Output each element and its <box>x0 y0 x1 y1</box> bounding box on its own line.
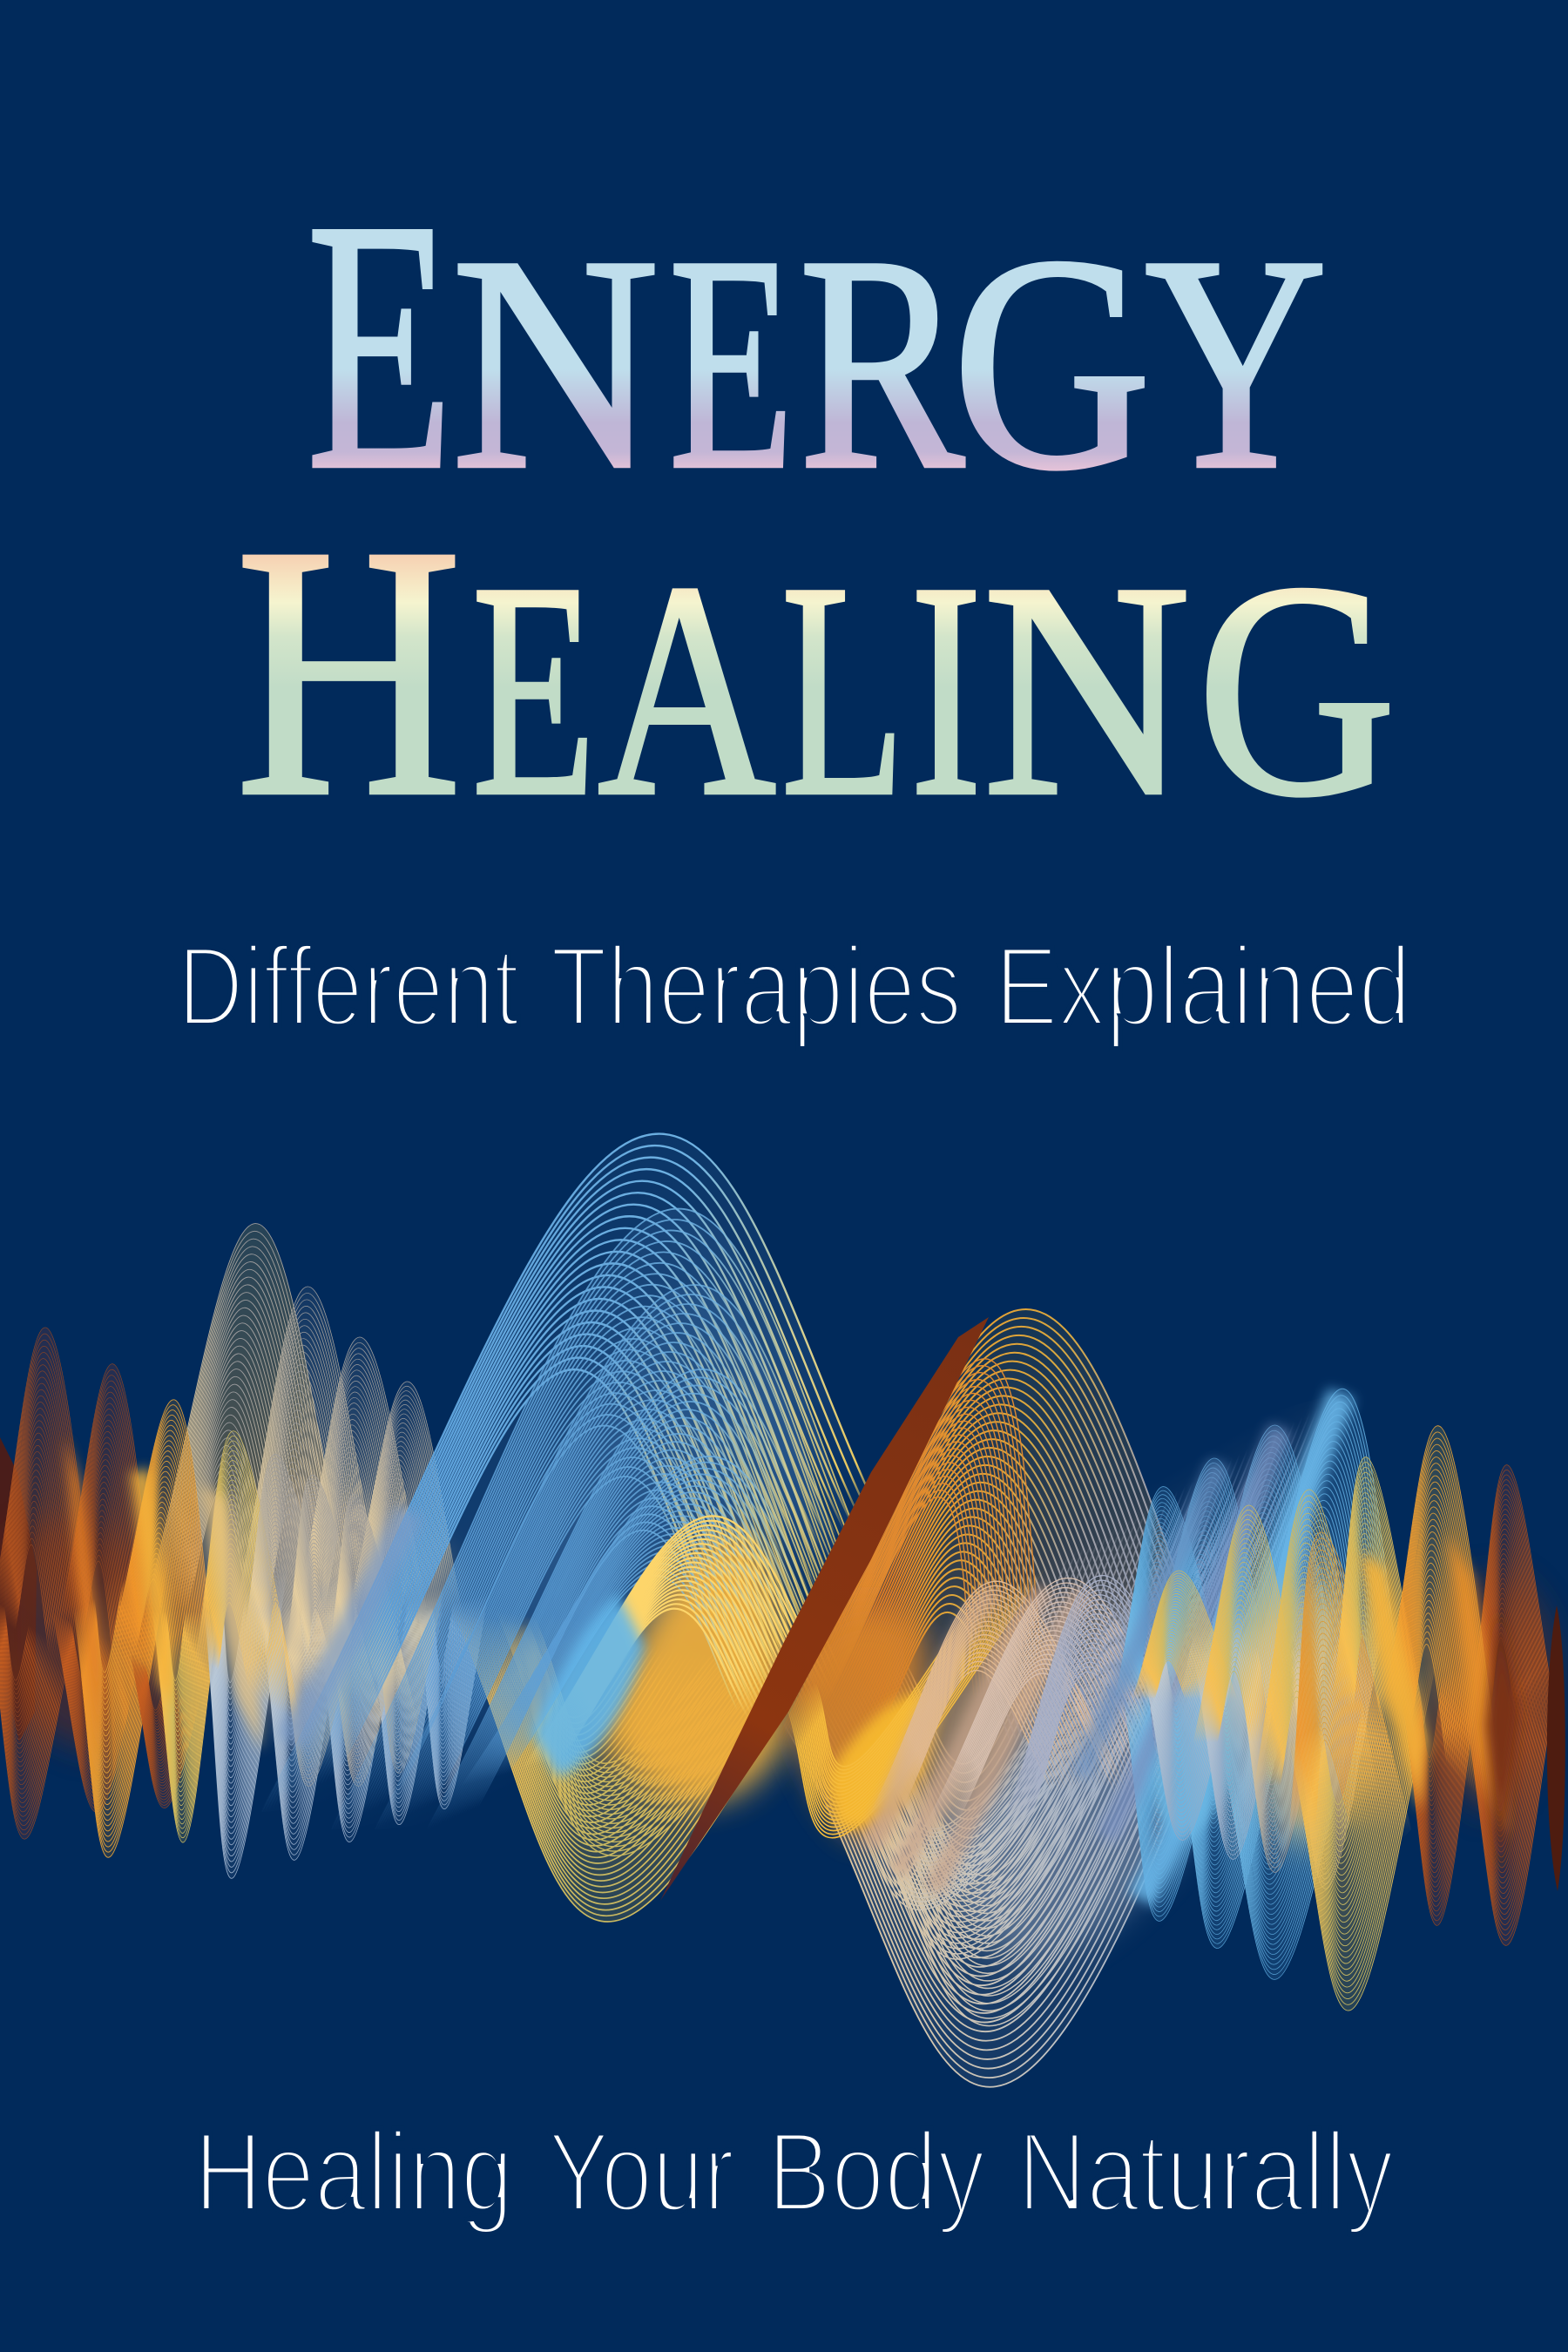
blue diagonal bands <box>1080 1394 1342 1899</box>
wave: left warm lobes <box>0 1213 374 1882</box>
title: Energy: G <box>952 194 1152 533</box>
title: Energy: N <box>451 193 659 532</box>
tagline: Your <box>548 2108 734 2235</box>
title: Healing: I <box>910 519 982 859</box>
subtitle: Therapies <box>551 923 962 1050</box>
tagline: Body <box>767 2108 985 2235</box>
title: Energy: E <box>669 193 794 532</box>
tagline: Healing <box>194 2108 513 2235</box>
title: Healing: L <box>781 519 905 860</box>
title: Energy: R <box>799 194 966 533</box>
wave: right warm lobes <box>1327 1373 1565 1963</box>
subtitle: Different <box>178 923 519 1050</box>
title: Healing: E <box>472 519 596 860</box>
wave: central crest and trough <box>660 1309 1342 2218</box>
peach diagonal bands <box>871 1590 1085 1890</box>
wave: right pale lobes <box>1132 1490 1437 2046</box>
title: Energy: E <box>307 146 453 544</box>
title: Healing: G <box>1197 521 1396 860</box>
wave: large blue crest <box>252 969 990 1957</box>
wave: left pale lobes <box>192 1287 488 1896</box>
tagline: Naturally <box>1017 2108 1394 2235</box>
wave: right blue lobes <box>1080 1374 1437 1997</box>
title: Healing: A <box>598 520 776 860</box>
title: Healing: H <box>235 472 463 872</box>
brown diagonal band <box>660 1317 989 1901</box>
subtitle: Explained <box>995 923 1411 1050</box>
title: Healing <box>235 472 1396 872</box>
title: Healing: N <box>983 520 1191 859</box>
title: Energy: Y <box>1145 193 1328 532</box>
title: Energy <box>307 146 1328 544</box>
energy wave illustration <box>0 969 1565 2218</box>
